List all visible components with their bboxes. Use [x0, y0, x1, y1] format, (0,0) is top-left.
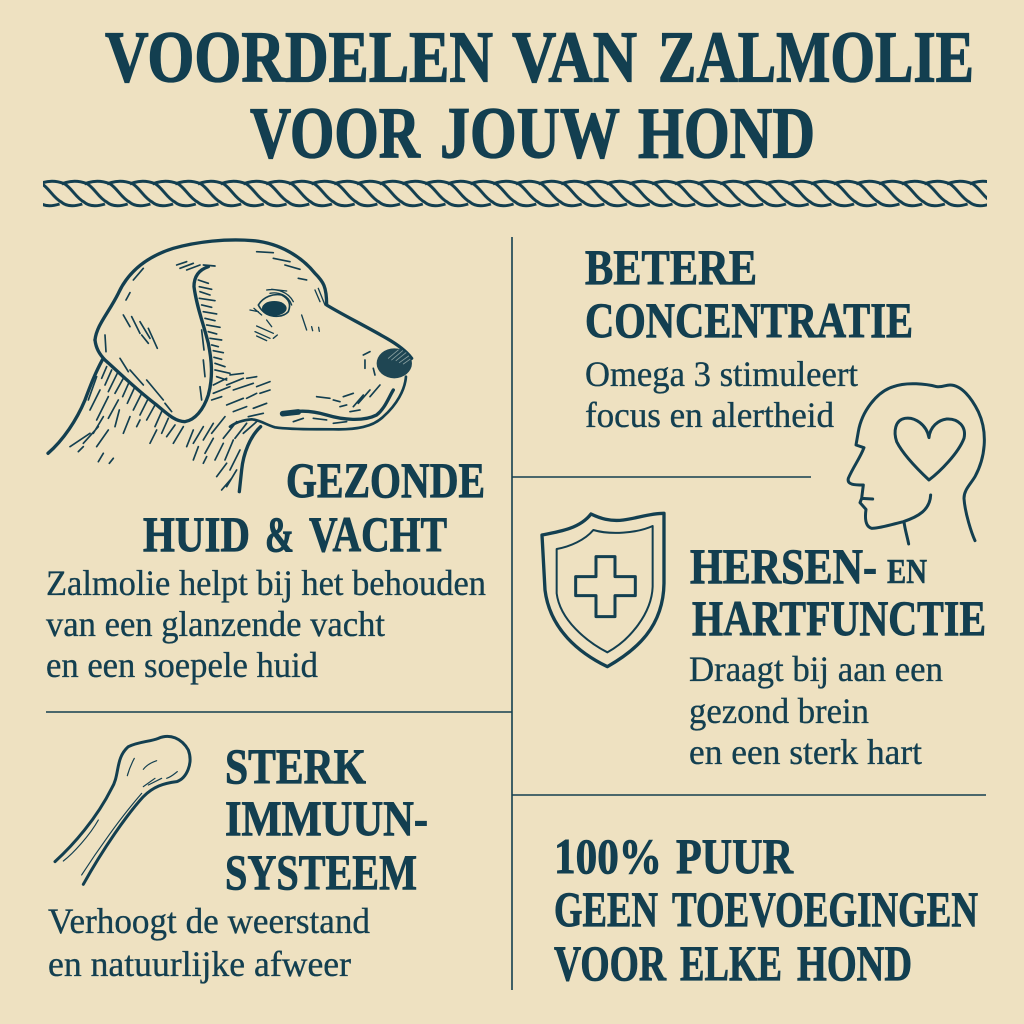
panel: betere concentratie — [585, 239, 984, 544]
icon: shield with cross — [542, 513, 664, 667]
text: immuunsysteem description: Verhoogt de weerstand — [48, 901, 370, 941]
title — [105, 16, 974, 174]
panel: 100% puur: 100% — [554, 828, 662, 884]
heading: gezonde huid en vacht: HUID — [143, 506, 250, 562]
panel: sterk immuunsysteem — [48, 736, 428, 984]
text: hersen- en hartfunctie description — [689, 649, 943, 772]
text: huid en vacht description: Zalmolie helpt bij het behouden — [46, 563, 486, 603]
heading: hersen- en hartfunctie — [690, 538, 986, 646]
panel: gezonde huid en vacht — [46, 240, 486, 685]
text: huid en vacht description: van een glanzende vacht — [46, 604, 385, 644]
heading: gezonde huid en vacht — [143, 452, 485, 562]
rope divider — [43, 178, 987, 210]
panel: 100% puur: VOOR — [554, 935, 667, 991]
panel: 100% puur: HOND — [797, 935, 912, 991]
text: hersen- en hartfunctie description: Draagt bij aan een — [689, 649, 943, 689]
panel: 100% puur — [554, 828, 978, 991]
text: concentratie description: Omega 3 stimuleert — [585, 354, 858, 394]
text: immuunsysteem description — [48, 901, 370, 984]
text: huid en vacht description — [46, 563, 486, 685]
heading: betere concentratie: CONCENTRATIE — [585, 292, 913, 348]
heading: hersen- en hartfunctie: HERSEN- — [690, 538, 877, 594]
text: huid en vacht description: en een soepele huid — [46, 645, 318, 685]
icon: dog head — [48, 240, 412, 492]
panel: 100% puur: ELKE — [680, 935, 782, 991]
heading: betere concentratie: BETERE — [585, 239, 757, 295]
text: hersen- en hartfunctie description: en een sterk hart — [689, 732, 922, 772]
title: VOORDELEN — [105, 16, 493, 98]
icon: bone — [55, 736, 190, 884]
icon: head with heart — [848, 384, 984, 544]
heading: sterk immuunsysteem: STERK — [225, 738, 366, 794]
heading: sterk immuunsysteem: SYSTEEM — [225, 844, 417, 900]
title: HOND — [638, 92, 815, 174]
heading: sterk immuunsysteem — [225, 738, 428, 900]
panel: hersen- en hartfunctie — [542, 513, 986, 772]
heading: hersen- en hartfunctie: EN — [887, 552, 927, 591]
heading: gezonde huid en vacht: & — [265, 506, 294, 562]
heading: gezonde huid en vacht: GEZONDE — [286, 452, 485, 508]
heading: gezonde huid en vacht: VACHT — [309, 506, 447, 562]
panel: 100% puur: PUUR — [676, 828, 794, 884]
text: concentratie description — [585, 354, 858, 435]
panel: 100% puur: GEEN — [554, 881, 658, 937]
title: VOOR — [250, 92, 421, 174]
text: immuunsysteem description: en natuurlijke afweer — [48, 944, 351, 984]
heading: sterk immuunsysteem: IMMUUN- — [225, 790, 428, 846]
title: VAN — [512, 16, 637, 98]
text: concentratie description: focus en alertheid — [585, 395, 834, 435]
title: JOUW — [440, 92, 620, 174]
text: hersen- en hartfunctie description: gezond brein — [689, 691, 869, 731]
heading: betere concentratie — [585, 239, 913, 348]
